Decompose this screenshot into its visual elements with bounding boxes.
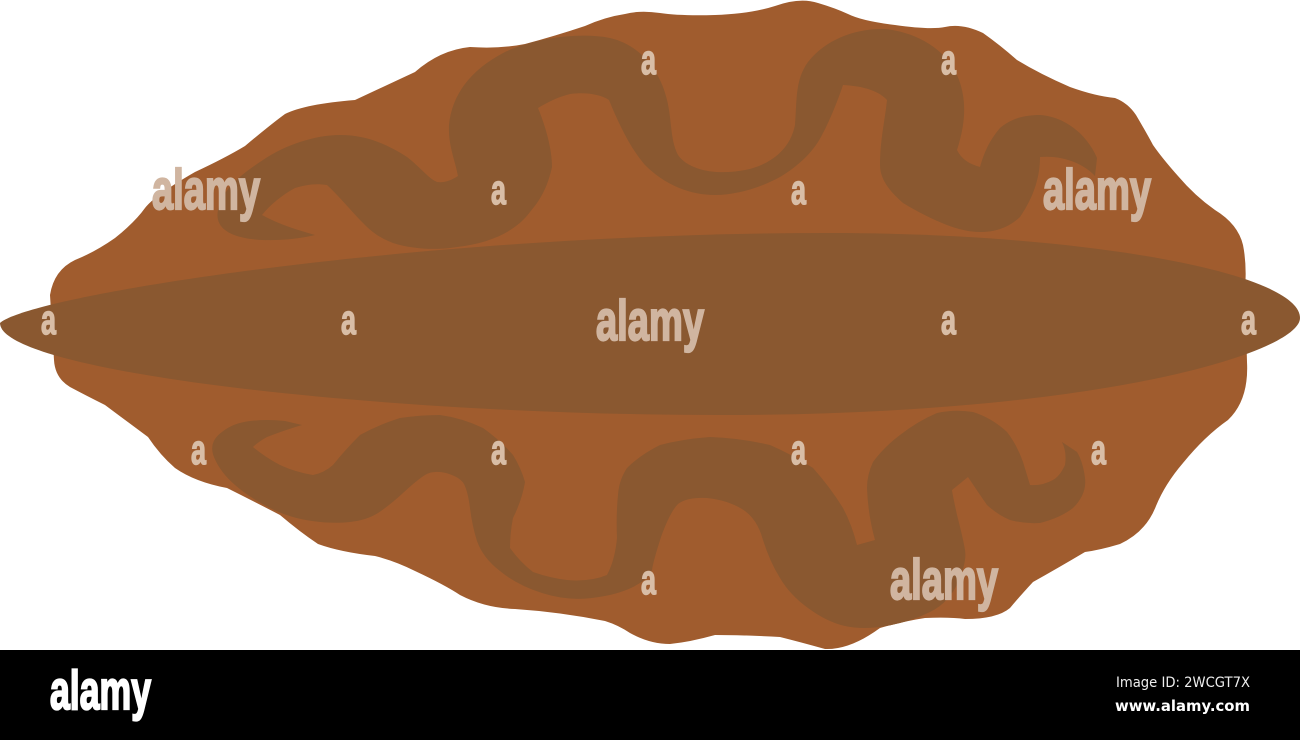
watermark: large alamy marks: alamy — [890, 548, 998, 612]
watermark: small a marks: a — [941, 36, 956, 83]
footer bar — [0, 650, 1300, 740]
watermark: small a marks: a — [641, 36, 656, 83]
watermark: small a marks: a — [641, 556, 656, 603]
watermark: large alamy marks: alamy — [1043, 158, 1151, 222]
watermark: small a marks: a — [791, 426, 806, 473]
footer logo: alamy — [50, 659, 151, 721]
image id: Image ID: 2WCGT7X — [1116, 675, 1250, 691]
watermark: small a marks: a — [1091, 426, 1106, 473]
lower kernel groove — [212, 411, 1085, 628]
watermark: small a marks: a — [341, 296, 356, 343]
watermark: small a marks: a — [791, 166, 806, 213]
watermark: small a marks: a — [1241, 296, 1256, 343]
watermark: small a marks — [41, 36, 1256, 603]
watermark: small a marks: a — [491, 166, 506, 213]
watermark: small a marks: a — [191, 426, 206, 473]
watermark: small a marks: a — [41, 296, 56, 343]
upper kernel groove — [217, 29, 1097, 249]
central seam — [0, 233, 1300, 415]
watermark: large alamy marks: alamy — [152, 158, 260, 222]
watermark: large alamy marks — [152, 158, 1151, 612]
watermark: small a marks: a — [941, 296, 956, 343]
watermark: large alamy marks: alamy — [596, 289, 704, 353]
website: www.alamy.com — [1115, 697, 1250, 715]
watermark: small a marks: a — [491, 426, 506, 473]
